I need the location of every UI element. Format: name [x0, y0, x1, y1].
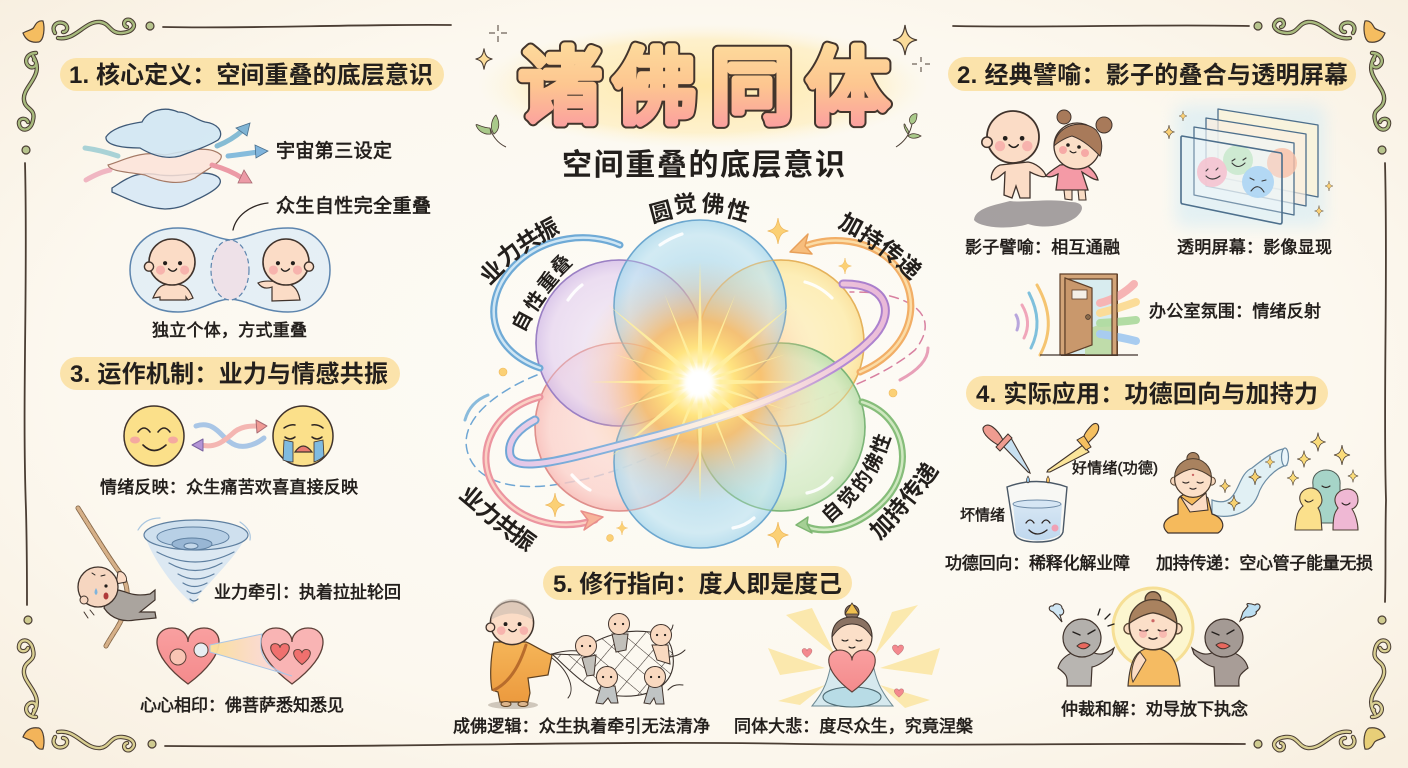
icon: crying face — [273, 406, 333, 466]
label: 加持传递 upper right: 传 — [874, 235, 908, 269]
title: 诸佛同体: 同 — [710, 41, 794, 134]
icon: overlapping cloud layers with arrows — [85, 109, 268, 209]
label: 自觉的佛性: 性 — [867, 431, 896, 458]
panel: 4 application — [945, 376, 1373, 719]
label: 自性重叠: 重 — [533, 267, 564, 297]
label: 加持传递 upper right: 加 — [835, 208, 867, 242]
subtitle: 空间重叠的底层意识 — [562, 149, 845, 182]
label: 自觉的佛性: 佛 — [859, 449, 888, 477]
icon: title sparkles and leaves — [476, 25, 930, 147]
callout line — [233, 203, 268, 230]
title: 诸佛同体 — [476, 24, 930, 148]
label: 业力共振 upper left: 振 — [531, 213, 563, 247]
label: 加持传递 upper right: 递 — [892, 250, 926, 284]
label: 圆觉佛性: 觉 — [672, 190, 698, 218]
label: 加持传递：空心管子能量无损 — [1156, 554, 1373, 573]
label: 业力共振 lower left: 共 — [489, 510, 523, 544]
heading 5: 5. 修行指向：度人即是度己 — [553, 571, 842, 598]
sparkles and dots — [499, 218, 897, 548]
arrow: blue arc — [494, 238, 620, 368]
label: 心心相印：佛菩萨悉知悉见 — [140, 696, 344, 715]
icon: figure clinging to rope — [78, 508, 156, 646]
panel: 2 classic metaphors — [948, 57, 1356, 355]
icon: happy face — [124, 406, 184, 466]
label: 情绪反映：众生痛苦欢喜直接反映 — [100, 478, 358, 497]
icon: bodhisattva with heart and rays — [768, 603, 940, 708]
label: 加持传递 lower right: 持 — [880, 493, 914, 527]
heading 4: 4. 实际应用：功德回向与加持力 — [976, 381, 1318, 408]
swoosh — [510, 284, 885, 464]
icon: buddha mediating two angry figures — [1049, 588, 1260, 686]
label: 众生自性完全重叠 — [276, 195, 431, 217]
label: 加持传递 lower right: 传 — [895, 475, 929, 509]
label: 业力牵引：执着拉扯轮回 — [214, 583, 401, 602]
label: 业力共振 lower left: 振 — [506, 522, 540, 556]
icon: monk pulling a net of people — [486, 599, 552, 709]
icon: glowing figures with stars — [1287, 432, 1358, 530]
label: 自性重叠: 叠 — [546, 250, 577, 281]
panel: 5 practice — [453, 566, 973, 736]
ornament: top right corner — [1254, 20, 1389, 154]
label: 加持传递 lower right: 加 — [865, 510, 899, 544]
icon: two babies in overlapping bubbles — [130, 228, 330, 312]
label: 影子譬喻：相互通融 — [965, 237, 1120, 257]
label: 自觉的佛性: 觉 — [833, 482, 864, 512]
label: 独立个体，方式重叠 — [152, 321, 307, 340]
label: 业力共振 lower left: 业 — [455, 481, 489, 515]
panel: 3 mechanism — [60, 357, 401, 715]
label: 宇宙第三设定 — [276, 140, 392, 162]
label: 同体大悲：度尽众生，究竟涅槃 — [734, 717, 973, 736]
icon: beaker and droppers — [983, 423, 1099, 542]
icon: exchange arrows — [192, 420, 267, 451]
label: 透明屏幕：影像显现 — [1177, 238, 1332, 257]
dashed orbits — [466, 292, 925, 487]
label: 业力共振 upper left: 力 — [492, 237, 526, 271]
title: 诸佛同体: 体 — [806, 41, 890, 134]
icon: net with people — [552, 614, 685, 704]
label: 自性重叠: 性 — [520, 286, 551, 316]
label: 加持传递 lower right: 递 — [909, 458, 943, 492]
ornament: bottom right corner — [1254, 616, 1389, 750]
label: 业力共振 lower left — [455, 481, 540, 556]
label: 好情绪(功德) — [1072, 459, 1158, 477]
title: 诸佛同体: 体 — [806, 41, 890, 134]
label: 成佛逻辑：众生执着牵引无法清净 — [453, 717, 710, 736]
bubbles — [535, 220, 865, 548]
icon: buddha passing stars through a hollow tube — [1164, 448, 1288, 533]
heading 1: 1. 核心定义：空间重叠的底层意识 — [69, 61, 433, 89]
label: 办公室氛围：情绪反射 — [1149, 302, 1321, 321]
title: 诸佛同体: 佛 — [614, 41, 696, 134]
label: 功德回向：稀释化解业障 — [945, 554, 1130, 573]
label: 坏情绪 — [960, 507, 1005, 524]
ornament: top left corner — [19, 20, 154, 154]
panel: 1 core definition — [60, 58, 444, 340]
label: 圆觉佛性 — [647, 190, 752, 228]
heading 2: 2. 经典譬喻：影子的叠合与透明屏幕 — [957, 62, 1348, 89]
label: 自觉的佛性 — [817, 431, 896, 528]
label: 自性重叠: 自 — [508, 307, 537, 335]
title: 诸佛同体: 同 — [710, 41, 794, 134]
title: 诸佛同体: 诸 — [518, 41, 602, 134]
label: 业力共振 upper left: 共 — [511, 224, 545, 258]
title: 诸佛同体: 诸 — [518, 41, 602, 134]
arrow: pink arc — [486, 397, 603, 530]
label: 业力共振 upper left: 业 — [475, 255, 509, 289]
icon: door with rainbow emotion waves — [1016, 274, 1138, 355]
heading 3: 3. 运作机制：业力与情感共振 — [70, 360, 388, 388]
label: 自觉的佛性: 自 — [817, 497, 847, 528]
bubble highlights — [568, 234, 832, 528]
label: 加持传递 lower right — [865, 458, 943, 544]
icon: hearts joined by light beam — [157, 628, 323, 684]
arrow: green arc — [796, 402, 902, 533]
label: 自觉的佛性: 的 — [847, 466, 878, 496]
label: 圆觉佛性: 圆 — [647, 196, 675, 228]
label: 加持传递 upper right: 持 — [854, 221, 888, 255]
arrow: orange arc — [790, 234, 911, 372]
label: 自性重叠 — [508, 250, 577, 335]
icon: two children and merged shadow — [974, 110, 1112, 227]
central diagram: five overlapping bubbles — [455, 190, 943, 556]
ornament: bottom left corner — [19, 616, 156, 750]
label: 仲裁和解：劝导放下执念 — [1061, 699, 1248, 719]
label: 业力共振 upper left — [475, 213, 563, 289]
title: 诸佛同体: 佛 — [614, 41, 696, 134]
label: 圆觉佛性: 性 — [724, 195, 752, 227]
icon: whirlpool — [138, 518, 250, 604]
label: 业力共振 lower left: 力 — [472, 496, 506, 530]
label: 加持传递 upper right — [835, 208, 926, 284]
label: 圆觉佛性: 佛 — [700, 190, 726, 218]
icon: transparent screens with emotion faces — [1163, 105, 1333, 227]
central light burst — [578, 260, 822, 504]
